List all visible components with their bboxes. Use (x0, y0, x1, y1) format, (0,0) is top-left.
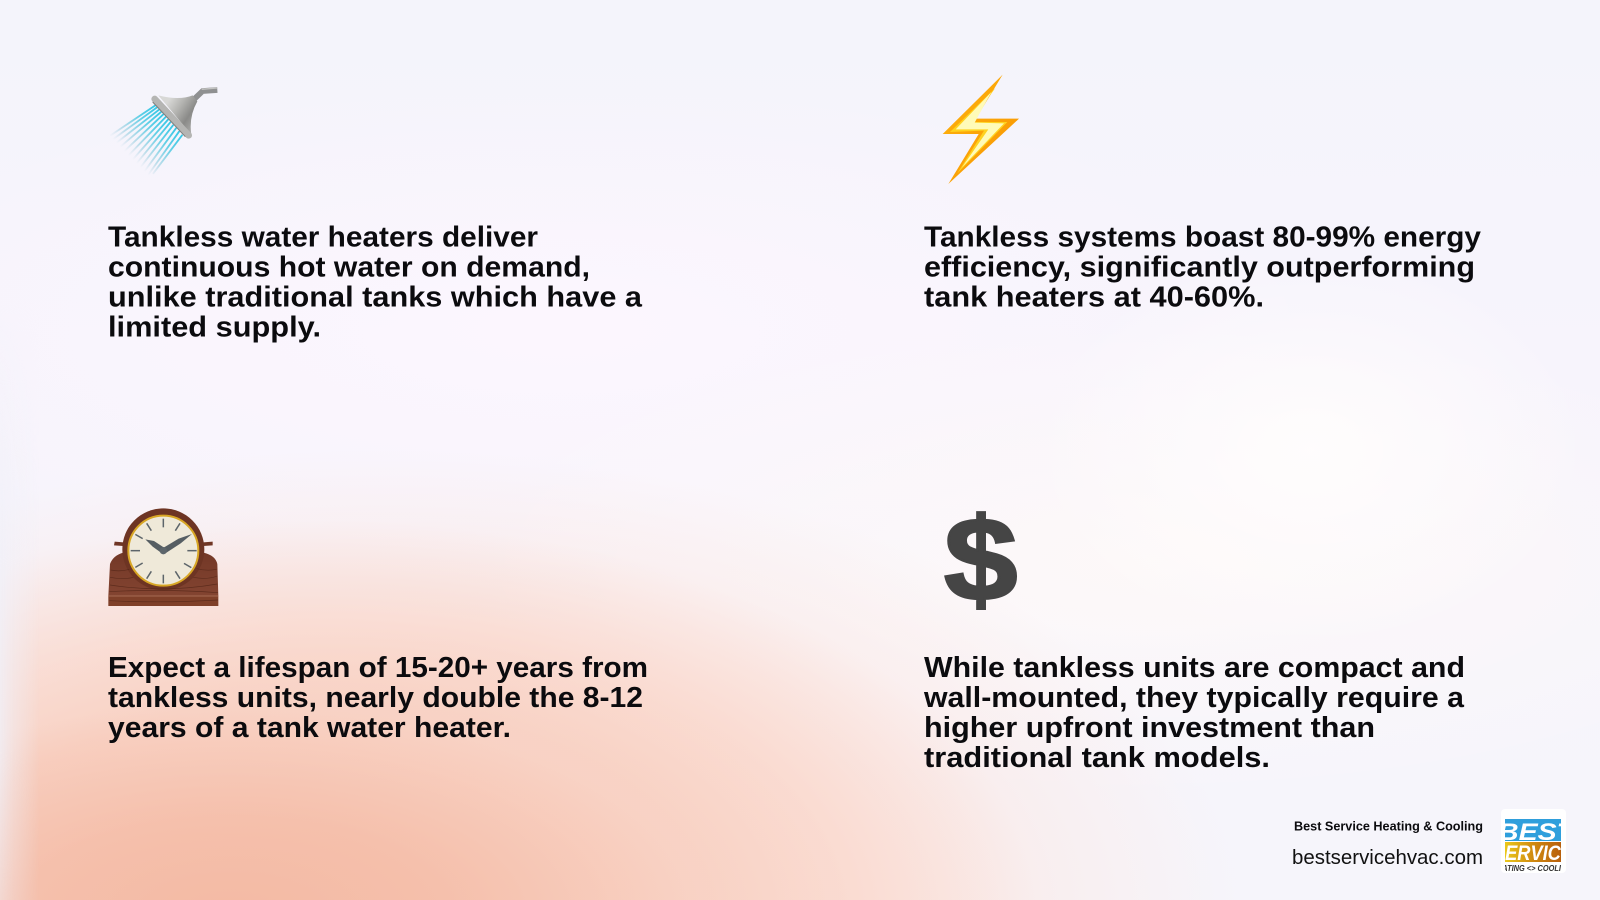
text: cost: wall-mounted, they typically require a (923, 682, 1465, 714)
icon: dollar sign: $ (944, 494, 1017, 625)
website: bestservicehvac.com (1292, 847, 1483, 869)
logo: SERVICE (1493, 842, 1574, 865)
footer: brand (1292, 809, 1577, 873)
text: lifespan: Expect a lifespan of 15-20+ years from (108, 652, 648, 684)
text: cost (923, 652, 1465, 774)
company name: Best Service Heating & Cooling (1294, 818, 1483, 834)
text: lifespan (108, 652, 648, 744)
panel: continuous hot water (108, 88, 643, 343)
text: energy efficiency: efficiency, significantly outperforming (924, 251, 1475, 283)
panel: lifespan (108, 508, 648, 744)
text: continuous hot water: unlike traditional tanks which have a (108, 281, 643, 313)
background: pale left edge fade (0, 579, 32, 900)
panel: cost (923, 494, 1465, 774)
logo (1501, 809, 1566, 873)
text: energy efficiency: tank heaters at 40-60%. (924, 281, 1264, 313)
text: continuous hot water: Tankless water heaters deliver (108, 221, 538, 253)
text: continuous hot water: continuous hot water on demand, (108, 251, 590, 283)
icon: lightning bolt (942, 74, 1019, 184)
logo: HEATING <> COOLING (1492, 863, 1572, 873)
text: continuous hot water (108, 221, 643, 343)
text: continuous hot water: limited supply. (108, 311, 321, 343)
text: lifespan: years of a tank water heater. (108, 712, 511, 744)
text: cost: traditional tank models. (924, 742, 1270, 774)
text: energy efficiency: Tankless systems boast 80-99% energy (924, 221, 1481, 253)
text: cost: higher upfront investment than (924, 712, 1375, 744)
text: lifespan: tankless units, nearly double the 8-12 (108, 682, 643, 714)
icon: mantel clock (108, 508, 218, 606)
icon: shower head (112, 87, 218, 174)
text: energy efficiency (924, 221, 1481, 313)
text: cost: While tankless units are compact and (924, 652, 1465, 684)
logo: BEST (1498, 819, 1577, 846)
panel: energy efficiency (924, 75, 1481, 313)
